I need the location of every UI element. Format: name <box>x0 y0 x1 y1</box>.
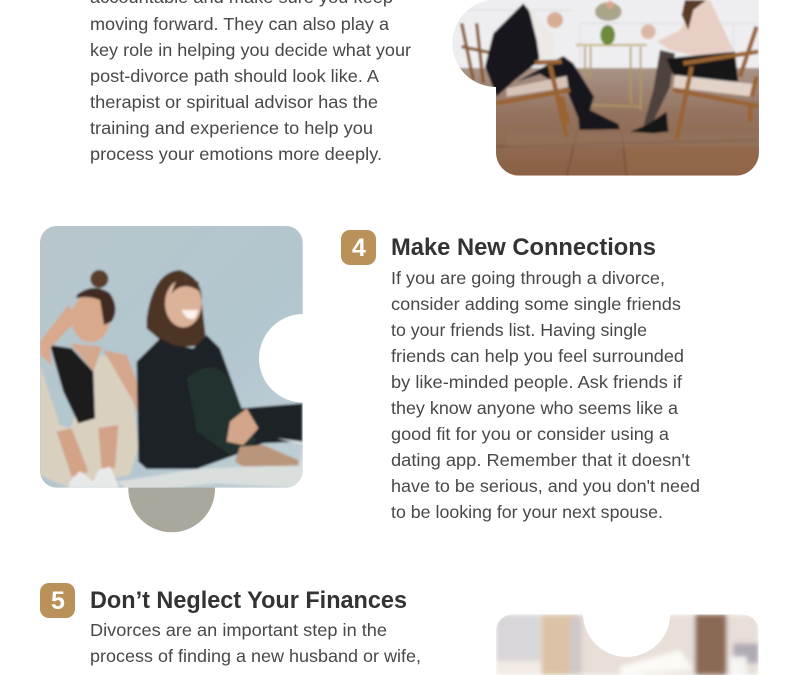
text block: step 4 body: they know anyone who seems like a <box>391 398 678 418</box>
text block: step 4 body: have to be serious, and you don't need <box>391 476 700 496</box>
text block: step 4 body: good fit for you or consider using a <box>391 424 669 444</box>
right woman <box>147 270 207 348</box>
bench <box>117 438 303 492</box>
text block: step 3 body: process your emotions more deeply. <box>90 144 382 164</box>
left chair <box>462 23 490 83</box>
text block: step 4 body: to be looking for your next spouse. <box>391 502 663 522</box>
table and vase <box>575 42 648 48</box>
puzzle bump <box>128 446 215 532</box>
badge: number 4: 4 <box>352 234 366 262</box>
text block: step 4 body <box>391 268 700 522</box>
photo: couple of people seated in therapy session, puzzle-shaped <box>452 0 759 176</box>
man's chair <box>507 76 568 97</box>
text block: step 3 body <box>90 0 411 164</box>
white puzzle notch <box>583 570 670 657</box>
text block: step 4 body: If you are going through a divorce, <box>391 268 665 288</box>
photo: two laughing women sitting on a bench, puzzle-shaped <box>37 222 348 532</box>
text block: step 3 body: post-divorce path should look like. A <box>90 66 379 86</box>
text block: step 5 body: Divorces are an important step in the <box>90 620 387 640</box>
photo: blurred interior, puzzle-shaped with notch <box>496 614 758 675</box>
heading: Make New Connections: Make New Connections <box>391 234 656 261</box>
text block: step 3 body: key role in helping you decide what your <box>90 40 411 60</box>
left woman <box>40 355 138 487</box>
white puzzle notch <box>259 314 348 403</box>
text block: step 3 body: training and experience to help you <box>90 118 373 138</box>
text block: step 3 body: moving forward. They can also play a <box>90 14 389 34</box>
man seated <box>485 3 543 97</box>
heading: Don't Neglect Your Finances: Don’t Neglect Your Finances <box>90 587 407 614</box>
text block: step 3 body: therapist or spiritual advisor has the <box>90 92 378 112</box>
text block: step 4 body: to your friends list. Having single <box>391 320 647 340</box>
woman seated <box>657 0 733 58</box>
woman's chair <box>673 75 753 97</box>
text block: step 4 body: consider adding some single friends <box>391 294 681 314</box>
badge: number 5: 5 <box>51 587 65 615</box>
text block: step 4 body: by like-minded people. Ask friends if <box>391 372 682 392</box>
text block: step 5 body: process of finding a new husband or wife, <box>90 646 421 666</box>
badge: number 4 <box>341 230 376 265</box>
text block: step 5 body <box>90 620 421 666</box>
badge: number 5 <box>40 583 75 618</box>
text block: step 4 body: dating app. Remember that it doesn't <box>391 450 690 470</box>
text block: step 4 body: friends can help you feel surrounded <box>391 346 684 366</box>
